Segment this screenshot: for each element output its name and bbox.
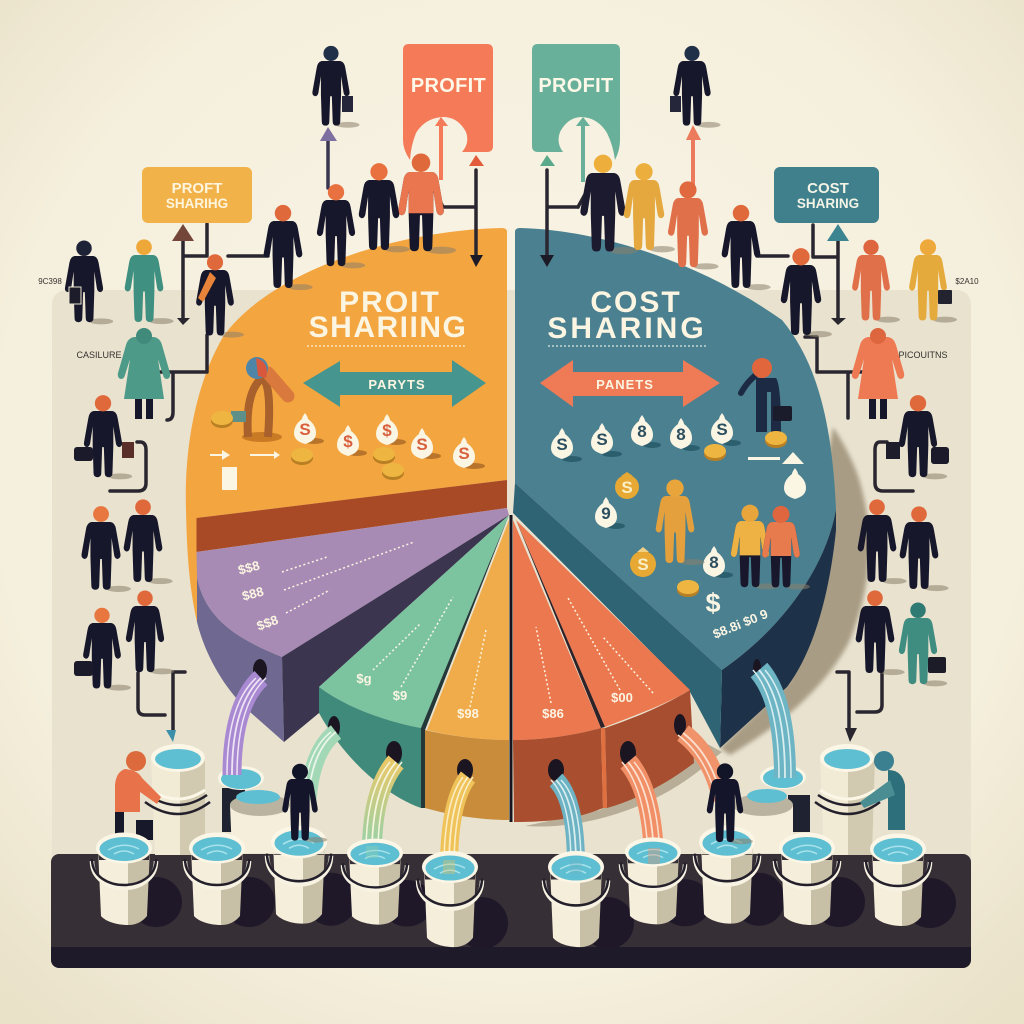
- arrow: parts: [540, 360, 720, 407]
- person: yellow right: [624, 163, 675, 252]
- connector lines: [110, 140, 913, 733]
- money bags: $: [343, 432, 353, 451]
- slice: yellow: [425, 520, 509, 820]
- heading: cost sharing: SHARING: [547, 312, 707, 345]
- sign: cost sharing: [774, 167, 879, 223]
- person: far right upper: [722, 205, 771, 290]
- slice: purple: [196, 508, 509, 742]
- sign: profit red: [403, 44, 493, 180]
- money bags: 8: [637, 422, 647, 441]
- sign: profit red: PROFIT: [411, 75, 486, 97]
- coins: [677, 431, 787, 597]
- green labels: $g: [356, 671, 372, 686]
- back-right buckets: [733, 744, 880, 855]
- person: black figure right: [707, 763, 753, 844]
- gold bags: S: [637, 555, 649, 574]
- person: coral right: [668, 181, 719, 270]
- stream: coral far: [678, 733, 722, 802]
- person: orange partner: [762, 506, 810, 590]
- coral label: $00: [611, 690, 633, 705]
- person: orange worker: [115, 751, 161, 843]
- bent worker: [231, 357, 288, 442]
- purple labels: [236, 558, 280, 634]
- sign: cost sharing: SHARING: [797, 196, 859, 211]
- money bags: S: [299, 420, 311, 439]
- side labels: PICOUITNS: [898, 350, 948, 360]
- person: right middle a: [858, 499, 907, 584]
- money bags: S: [596, 430, 608, 449]
- center divider: [510, 515, 512, 822]
- stream ends over buckets: [372, 846, 654, 874]
- money bags: [294, 413, 485, 469]
- slice: profit sharing: [186, 228, 507, 622]
- spouts: [253, 659, 761, 781]
- stream: green: [303, 732, 336, 800]
- person: left middle b: [124, 499, 173, 584]
- green labels: $9: [393, 688, 407, 703]
- arrow: parts: PARYTS: [368, 377, 426, 392]
- person: coral far right: [852, 240, 900, 323]
- heading: profit sharing: SHARIING: [309, 311, 467, 344]
- money bags: $: [382, 421, 392, 440]
- side labels: [38, 277, 979, 360]
- bent worker with briefcase: [741, 358, 792, 432]
- person: left lower b: [126, 591, 174, 674]
- payout marks: [705, 452, 804, 642]
- person: yellow head holding line: [580, 155, 638, 254]
- sign: profit green: [532, 44, 620, 182]
- person: green: [125, 239, 174, 324]
- heading: profit sharing: [309, 286, 467, 344]
- person: yellow: [656, 479, 705, 565]
- small white marks: [210, 450, 280, 490]
- side labels: $2A10: [955, 277, 979, 286]
- water streams: [227, 670, 791, 866]
- money bags: 8: [709, 553, 719, 572]
- stream: coral: [622, 762, 660, 858]
- gold bags: [615, 472, 656, 577]
- person: top right with case: [670, 46, 721, 128]
- yellow label: $98: [457, 706, 479, 721]
- sign: profit green: PROFIT: [538, 75, 614, 97]
- stream: blue: [551, 780, 581, 866]
- person: coral dress: [852, 328, 904, 419]
- person: left lower with case: [74, 608, 131, 691]
- coins: [211, 411, 404, 480]
- money bags: [551, 413, 806, 578]
- sign: cost sharing: COST: [807, 180, 849, 197]
- person: black figure left: [282, 764, 327, 843]
- slice: coral: [516, 520, 694, 808]
- person: top left with case: [312, 46, 360, 128]
- purple labels: $$8: [236, 558, 261, 578]
- side labels: CASILURE: [76, 350, 122, 360]
- stream: teal: [753, 670, 791, 778]
- sign: profit sharing: [142, 167, 252, 223]
- green labels: [356, 671, 407, 703]
- person: left with cases: [74, 395, 134, 479]
- back-left buckets: [145, 744, 290, 855]
- money bags: S: [458, 444, 470, 463]
- money bags: S: [416, 435, 428, 454]
- person: left middle a: [81, 506, 131, 592]
- person: far left upper: [264, 205, 313, 290]
- person: teal right with case: [899, 603, 947, 686]
- heading: cost sharing: COST: [590, 286, 682, 319]
- sign: profit sharing: PROFT: [172, 180, 222, 197]
- money bags: 8: [676, 425, 686, 444]
- pie shadow: [720, 427, 869, 755]
- arrow: parts: PANETS: [596, 377, 654, 392]
- person: right middle b: [900, 506, 949, 591]
- stream: purple: [227, 678, 266, 775]
- arrowheads: [166, 125, 857, 742]
- gold bags: S: [621, 478, 633, 497]
- arrow: parts: [303, 360, 486, 407]
- slice: red: [513, 520, 603, 822]
- person: yellow far right with case: [909, 239, 957, 323]
- stream: yellow: [444, 777, 473, 862]
- heading: cost sharing: [547, 286, 707, 345]
- person: teal worker: [860, 751, 905, 830]
- pie chart: [186, 228, 836, 822]
- money bags: S: [716, 420, 728, 439]
- person: right lower a: [856, 590, 905, 675]
- purple labels: $$8: [255, 612, 280, 634]
- buckets: left row: [92, 826, 508, 949]
- person: yellow partner: [731, 505, 779, 589]
- payout marks: $8.8i $0 9: [711, 606, 770, 642]
- person: right with cases: [886, 395, 949, 479]
- buckets: right row: [544, 826, 956, 949]
- person: orange holding line: [398, 153, 456, 254]
- backdrop panel: [52, 290, 971, 930]
- sign: profit sharing: SHARIHG: [166, 196, 228, 211]
- person: row 2 left: [317, 184, 365, 268]
- heading: profit sharing: PROIT: [339, 286, 441, 319]
- slice: green: [319, 515, 509, 808]
- person: row 1 left: [359, 163, 410, 252]
- purple labels: $88: [240, 584, 265, 604]
- stream: yellow green: [366, 762, 402, 852]
- red label: $86: [542, 706, 564, 721]
- money bags: S: [556, 435, 568, 454]
- payout marks: $: [705, 588, 721, 618]
- money bags: 9: [601, 504, 611, 523]
- shadow under slices: [525, 740, 722, 827]
- side labels: 9C398: [38, 277, 62, 286]
- person: sash: [196, 254, 244, 338]
- person: green dress: [118, 328, 170, 419]
- slice: cost sharing: [513, 228, 836, 748]
- person: right upper inner: [781, 248, 832, 337]
- person: dark with case: [65, 241, 113, 324]
- dark floor: [51, 854, 971, 968]
